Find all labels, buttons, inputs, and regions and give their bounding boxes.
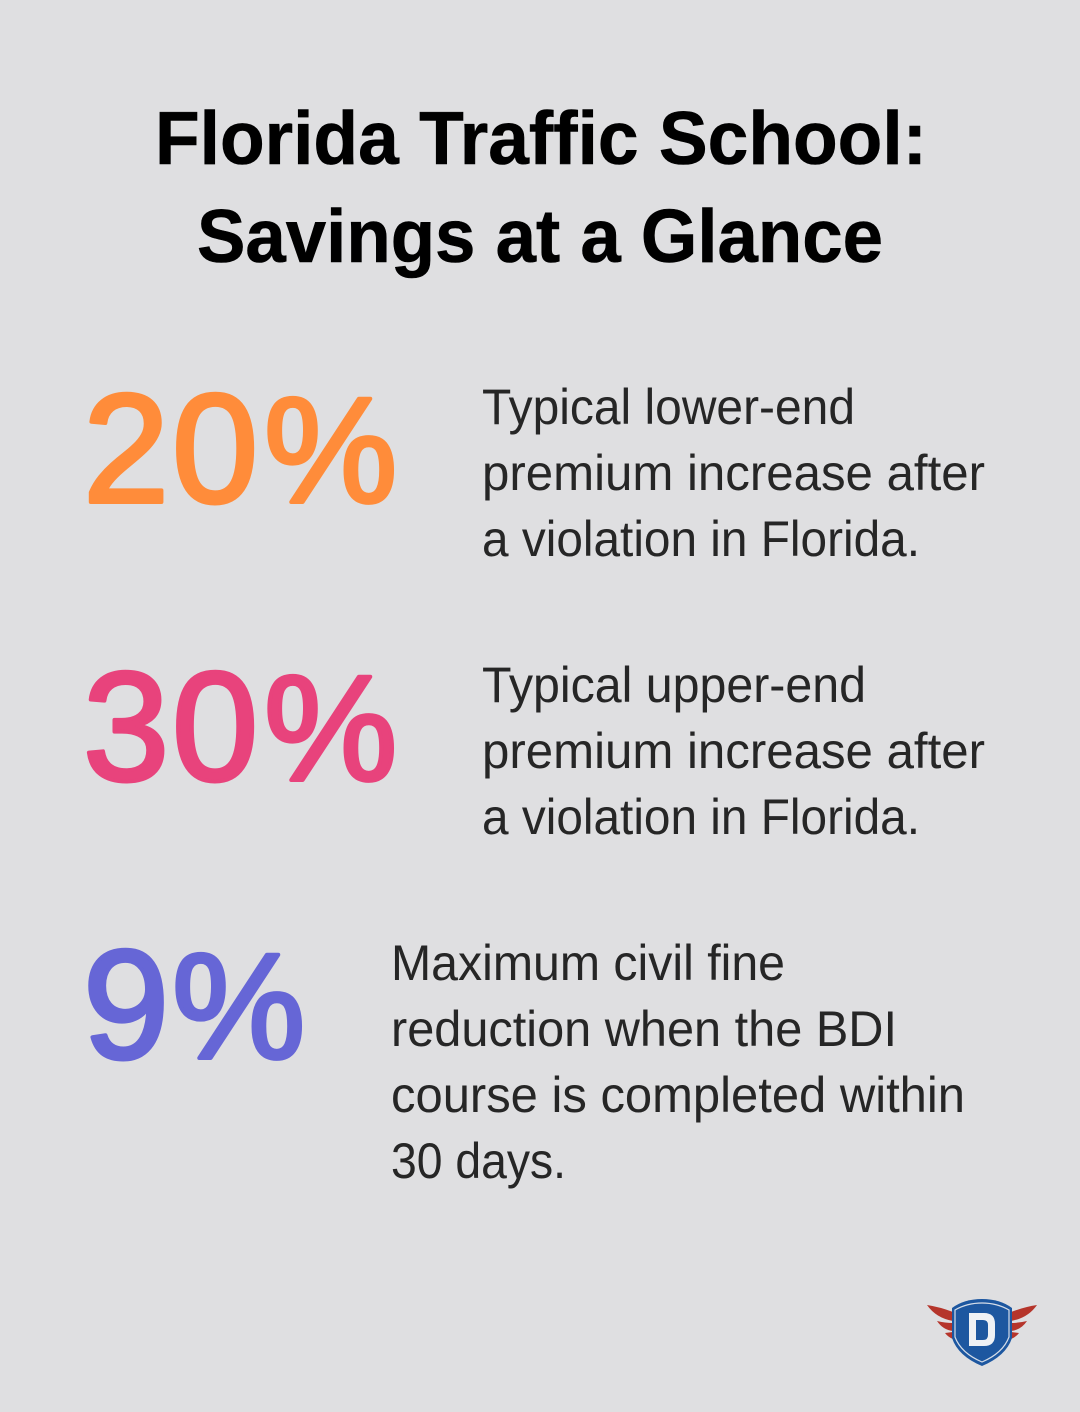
stat description: lower-end increase: premium increase after <box>482 445 985 501</box>
title: Florida Traffic School: <box>155 96 927 180</box>
stat description: civil fine reduction: Maximum civil fine <box>391 935 785 991</box>
stat description: civil fine reduction <box>391 935 965 1189</box>
shield <box>952 1299 1012 1366</box>
stat value: 30%: % <box>264 644 397 812</box>
stat: 20% <box>83 362 985 567</box>
stat value: 9%: % <box>172 922 305 1090</box>
stat description: upper-end increase: a violation in Florida. <box>482 789 920 845</box>
stat description: upper-end increase <box>482 657 985 845</box>
stat value: 9%: 9 <box>83 918 169 1091</box>
stat description: lower-end increase <box>482 379 985 567</box>
stat description: lower-end increase: a violation in Florida. <box>482 511 920 567</box>
stat description: civil fine reduction: 30 days. <box>391 1133 566 1189</box>
stat description: civil fine reduction: reduction when the BDI <box>391 1001 897 1057</box>
stat: 9% <box>83 918 965 1189</box>
icon: winged shield logo <box>927 1299 1037 1366</box>
stat value: 30%: 30 <box>83 640 258 813</box>
title: Savings at a Glance <box>197 194 883 278</box>
stat: 30% <box>83 640 985 845</box>
title <box>155 96 927 278</box>
stat value: 20%: % <box>264 366 397 534</box>
right wing <box>1011 1305 1037 1339</box>
stat description: upper-end increase: premium increase after <box>482 723 985 779</box>
stat description: lower-end increase: Typical lower-end <box>482 379 855 435</box>
shield letter D <box>969 1313 995 1346</box>
left wing <box>927 1305 953 1339</box>
stat value: 20%: 20 <box>83 362 258 535</box>
stat description: upper-end increase: Typical upper-end <box>482 657 866 713</box>
stat description: civil fine reduction: course is completed within <box>391 1067 965 1123</box>
